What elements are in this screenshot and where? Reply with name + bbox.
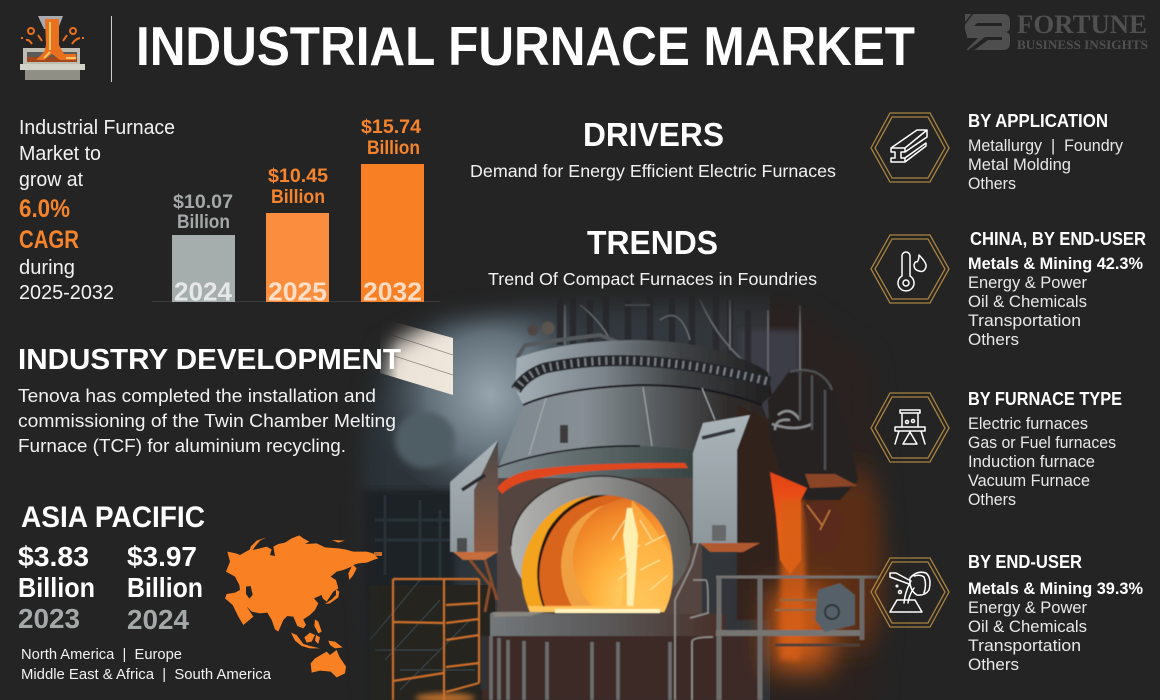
- other regions: North America | Europe: [21, 646, 182, 663]
- Asia Pacific stats: Billion: [18, 572, 95, 603]
- by end-user: BY END-USER: [968, 552, 1082, 572]
- bar 2024: $10.07: [173, 191, 233, 213]
- by end-user: Transportation: [968, 637, 1081, 655]
- bar 2025: $10.45: [268, 165, 328, 187]
- by furnace type: Vacuum Furnace: [968, 472, 1090, 490]
- CAGR text block: CAGR: [19, 226, 79, 254]
- bar 2024: Billion: [177, 211, 230, 233]
- by application: [968, 111, 1124, 193]
- CAGR text block: 2025-2032: [19, 282, 114, 304]
- trends: [488, 224, 817, 289]
- molten flow right: [770, 472, 845, 670]
- arch: [510, 474, 692, 589]
- drivers: DRIVERS: [583, 116, 724, 153]
- furnace base: [482, 612, 760, 700]
- by furnace type: BY FURNACE TYPE: [968, 389, 1122, 409]
- furnace upper ring: [515, 340, 772, 405]
- furnace machinery: [393, 296, 880, 700]
- left wing: [450, 440, 498, 552]
- by furnace type: Gas or Fuel furnaces: [968, 434, 1116, 452]
- china by end-user: Energy & Power: [968, 274, 1087, 292]
- right wing: [693, 415, 750, 543]
- by end-user: Oil & Chemicals: [968, 618, 1087, 636]
- CAGR text block: [19, 117, 175, 304]
- Asia Pacific stats: $3.97: [127, 541, 197, 572]
- bar 2025: [266, 165, 329, 306]
- furnace hood: [498, 446, 694, 479]
- icon: thermometer and flame: [871, 235, 949, 303]
- drivers: [470, 116, 836, 181]
- furnace opening: [520, 494, 674, 613]
- other regions: [21, 646, 272, 683]
- other regions: Middle East & Africa | South America: [21, 666, 272, 683]
- by application: Metallurgy | Foundry: [968, 137, 1124, 155]
- logo: Fortune Business Insights: [964, 10, 1148, 52]
- left railing: [393, 579, 479, 700]
- CAGR text block: Industrial Furnace: [19, 117, 175, 139]
- by application: Metal Molding: [968, 156, 1071, 174]
- CAGR text block: Market to: [19, 143, 101, 165]
- Asia Pacific stats: 2024: [127, 604, 189, 635]
- drivers: Demand for Energy Efficient Electric Furnaces: [470, 161, 836, 181]
- china by end-user: CHINA, BY END-USER: [970, 229, 1146, 249]
- bar 2032: $15.74: [361, 116, 421, 138]
- header divider: [111, 16, 112, 82]
- trends: TRENDS: [587, 224, 718, 261]
- by end-user: Others: [968, 656, 1019, 674]
- title: INDUSTRIAL FURNACE MARKET: [136, 15, 915, 77]
- by application: BY APPLICATION: [968, 111, 1108, 131]
- Asia Pacific stats: $3.83: [18, 541, 89, 572]
- ledges: [453, 552, 498, 560]
- bar 2032: Billion: [367, 137, 420, 159]
- map: Asia Pacific: [225, 535, 378, 677]
- china by end-user: [968, 229, 1146, 349]
- Asia Pacific stats: Billion: [127, 572, 203, 603]
- right pipework: [768, 305, 858, 500]
- by furnace type: [968, 389, 1122, 509]
- industry development: INDUSTRY DEVELOPMENT: [18, 344, 401, 376]
- bar 2025: Billion: [271, 186, 325, 208]
- bar 2025: 2025: [268, 276, 327, 306]
- Asia Pacific stats: 2023: [18, 603, 80, 634]
- by end-user: [968, 552, 1143, 674]
- industry development: [18, 344, 401, 456]
- bar chart: [152, 116, 440, 306]
- by end-user: Energy & Power: [968, 599, 1087, 617]
- industry development: Tenova has completed the installation and: [18, 386, 376, 406]
- icon: pouring crucible: [871, 558, 949, 627]
- right dark mass: [736, 406, 782, 620]
- hot stripe: [497, 463, 688, 494]
- icon: furnace stand: [871, 393, 949, 462]
- trends: Trend Of Compact Furnaces in Foundries: [488, 269, 817, 289]
- front wall: [497, 478, 702, 618]
- by furnace type: Electric furnaces: [968, 415, 1088, 433]
- bar 2032: 2032: [363, 276, 422, 306]
- pipework top: [515, 300, 770, 376]
- by furnace type: Induction furnace: [968, 453, 1095, 471]
- logo: Fortune Business Insights: BUSINESS INSIGHTS: [1017, 38, 1148, 52]
- CAGR text block: grow at: [19, 169, 83, 191]
- window: [380, 318, 453, 395]
- china by end-user: Metals & Mining 42.3%: [968, 255, 1143, 273]
- industry development: Furnace (TCF) for aluminium recycling.: [18, 436, 346, 456]
- thin pipes: [675, 543, 713, 700]
- bar 2032: [361, 116, 424, 306]
- icon: steel beam: [871, 113, 949, 182]
- Asia Pacific stats: ASIA PACIFIC: [21, 501, 205, 534]
- CAGR text block: during: [19, 257, 75, 279]
- logo: Fortune Business Insights: FORTUNE: [1017, 10, 1147, 39]
- CAGR text block: 6.0%: [19, 195, 70, 223]
- Asia Pacific stats: [18, 501, 205, 635]
- header icon: molten metal casting: [20, 16, 85, 80]
- furnace illustration: [360, 299, 894, 700]
- bar 2024: 2024: [174, 276, 233, 306]
- right railing: [716, 577, 880, 700]
- industry development: commissioning of the Twin Chamber Melting: [18, 411, 396, 431]
- furnace cone: [498, 387, 766, 466]
- china by end-user: Transportation: [968, 312, 1081, 330]
- by application: Others: [968, 175, 1016, 193]
- bar 2024: [172, 191, 235, 306]
- china by end-user: Others: [968, 331, 1019, 349]
- by end-user: Metals & Mining 39.3%: [968, 580, 1143, 598]
- by furnace type: Others: [968, 491, 1016, 509]
- china by end-user: Oil & Chemicals: [968, 293, 1087, 311]
